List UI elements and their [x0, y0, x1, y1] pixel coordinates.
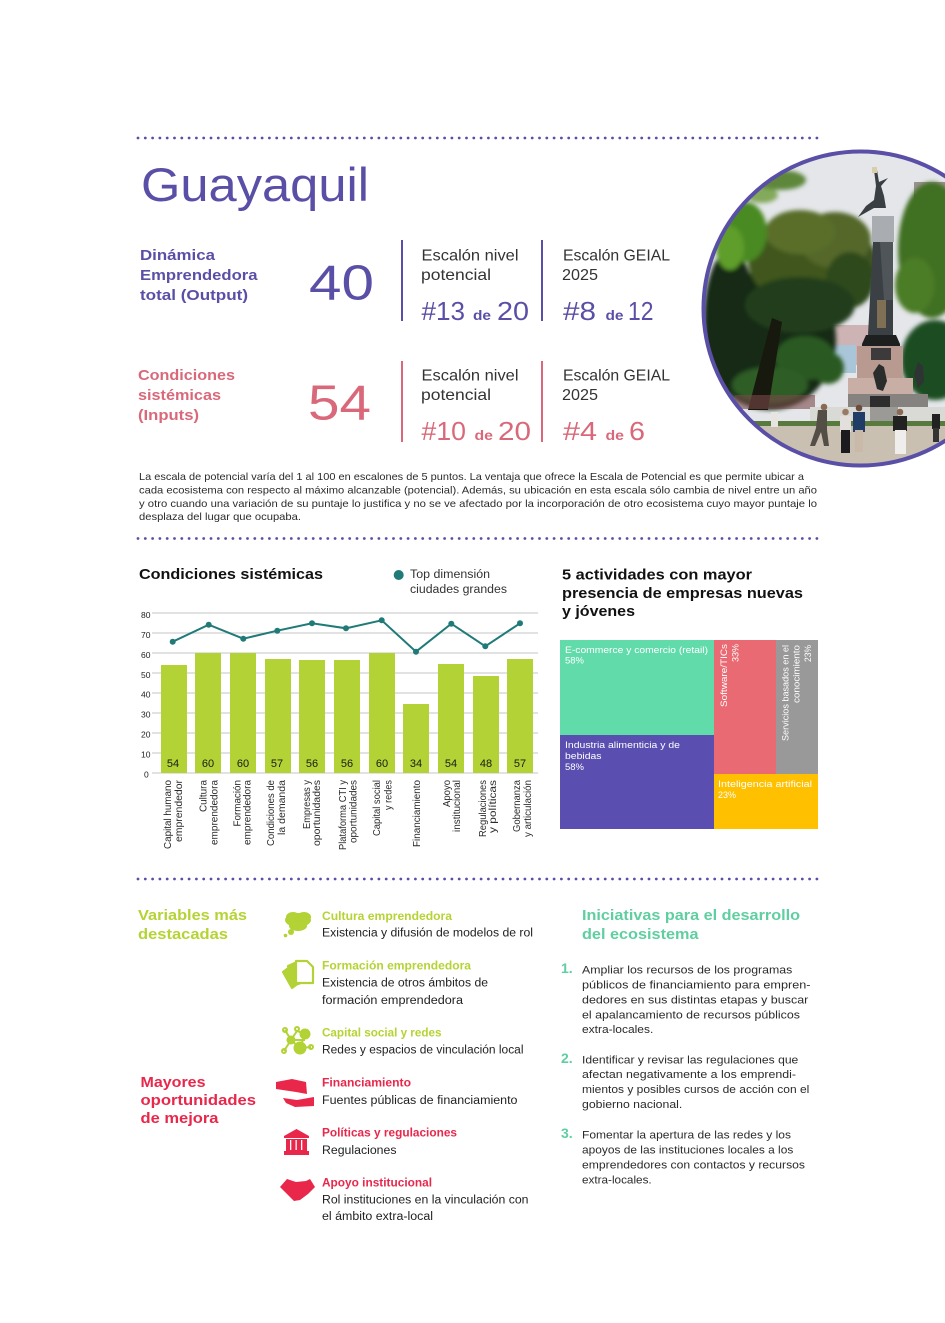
item: Formación emprendedora: formación emprendedora — [322, 995, 464, 1007]
item: Apoyo institucional: Apoyo institucional — [322, 1178, 432, 1190]
x axis labels: la demanda — [277, 780, 288, 835]
item: Financiamiento: Financiamiento — [322, 1078, 411, 1090]
heading: 5 actividades: y jóvenes — [562, 603, 635, 620]
heading: Mayores oportunidades de mejora: oportunidades — [140, 1092, 256, 1109]
item: Capital social y redes: Redes y espacios de vinculación local — [322, 1045, 524, 1057]
initiative 2 — [561, 1050, 809, 1111]
label: inputs: (Inputs) — [138, 407, 199, 424]
rank potential inputs: potencial — [421, 387, 491, 404]
cell: food industry: bebidas — [565, 751, 602, 762]
legend — [394, 569, 507, 596]
item: Políticas y regulaciones: Regulaciones — [322, 1145, 397, 1157]
title: Guayaquil — [141, 158, 369, 211]
rank GEIAL — [562, 248, 670, 326]
rank potential — [421, 248, 529, 326]
rank potential: Escalón nivel — [422, 248, 518, 264]
bar values: 48 — [480, 758, 492, 770]
bars — [161, 653, 533, 773]
label: output: Emprendedora — [140, 267, 258, 284]
cell: e-commerce: 58% — [565, 656, 585, 666]
item: Financiamiento: Fuentes públicas de financiamiento — [322, 1095, 518, 1107]
bar values: 34 — [410, 758, 422, 770]
y axis labels: 20 — [141, 730, 151, 740]
x axis labels: Financiamiento — [412, 780, 423, 847]
x axis labels: Plataforma CTI y — [338, 780, 349, 850]
icon: thought cloud — [284, 912, 311, 937]
cell: knowledge services: conocimiento — [791, 645, 802, 703]
cell: knowledge services: 23% — [803, 645, 814, 662]
y axis labels — [141, 610, 151, 780]
item: Políticas y regulaciones: Políticas y regulaciones — [322, 1128, 457, 1140]
label: inputs — [138, 367, 235, 424]
score 54: 54 — [308, 376, 371, 430]
rank potential: 20 — [497, 296, 529, 326]
line: top dimension large cities — [170, 617, 523, 655]
item: Apoyo institucional — [322, 1178, 528, 1223]
heading: Mayores oportunidades de mejora — [140, 1074, 256, 1127]
initiative 1: públicos de financiamiento para empren- — [582, 979, 811, 991]
y axis labels: 60 — [141, 650, 151, 660]
label: inputs: sistémicas — [138, 387, 221, 404]
label: output: Dinámica — [140, 247, 216, 264]
rank potential: #13 — [422, 296, 465, 326]
photo: Guayaquil monument in circular frame — [700, 150, 945, 476]
x axis labels: Condiciones de — [266, 780, 277, 846]
label: inputs: Condiciones — [138, 367, 235, 384]
initiative 3: 3. — [561, 1125, 573, 1141]
rank GEIAL: #8 — [563, 296, 596, 326]
cell: software — [714, 640, 776, 774]
y axis labels: 40 — [141, 690, 151, 700]
x axis labels: Cultura — [199, 780, 210, 812]
initiative 3 — [561, 1125, 806, 1186]
initiative 3: Fomentar la apertura de las redes y los — [582, 1129, 792, 1141]
x axis labels: Gobernanza — [512, 780, 523, 832]
cell: artificial intelligence: 23% — [718, 790, 737, 801]
bar values: 57 — [514, 758, 526, 770]
x axis labels: institucional — [452, 780, 463, 832]
heading: Condiciones sistémicas chart: Condiciones sistémicas — [139, 566, 323, 583]
item: Políticas y regulaciones — [322, 1128, 457, 1157]
heading: Mayores oportunidades de mejora: de mejora — [140, 1110, 219, 1127]
legend: Top dimensión — [410, 569, 490, 581]
x axis labels: y articulación — [523, 780, 534, 837]
x axis labels: Empresas y — [302, 780, 313, 829]
cell: e-commerce — [560, 640, 714, 735]
initiative 2: 2. — [561, 1050, 573, 1066]
x axis labels: Capital social — [372, 780, 383, 836]
x axis labels: y políticas — [488, 780, 499, 833]
y axis labels: 70 — [141, 630, 151, 640]
item: Financiamiento — [322, 1078, 518, 1107]
x axis labels — [163, 779, 534, 850]
item: Cultura emprendedora — [322, 911, 533, 940]
initiative 1: dedores en sus distintas etapas y buscar — [582, 994, 809, 1006]
label: output: total (Output) — [140, 287, 248, 304]
icon: institution building — [284, 1129, 309, 1155]
bar values: 54 — [167, 758, 179, 770]
rank GEIAL: Escalón GEIAL — [563, 248, 670, 264]
icon: hands giving — [276, 1079, 314, 1107]
bar values: 54 — [445, 758, 457, 770]
cell: food industry — [560, 735, 714, 829]
heading: Variables más destacadas — [138, 907, 247, 943]
rank GEIAL inputs: de — [606, 427, 624, 443]
cell: artificial intelligence — [714, 774, 818, 829]
legend: ciudades grandes — [410, 584, 507, 596]
x axis labels: Formación — [233, 780, 244, 826]
y axis labels: 30 — [141, 710, 151, 720]
treemap: activities — [560, 640, 818, 829]
rank GEIAL inputs — [562, 368, 670, 446]
initiative 2: Identificar y revisar las regulaciones que — [582, 1054, 798, 1066]
rank GEIAL inputs: 6 — [629, 416, 645, 446]
bar values: 57 — [271, 758, 283, 770]
text block: scale explanation — [139, 471, 817, 523]
icon: cards — [283, 961, 313, 988]
y axis labels: 0 — [144, 770, 149, 780]
x axis labels: Apoyo — [442, 780, 453, 807]
rank GEIAL inputs: 2025 — [562, 387, 598, 404]
bar values: 60 — [376, 758, 388, 770]
heading: 5 actividades — [562, 566, 803, 620]
cell: knowledge services: Servicios basados en el — [780, 645, 791, 741]
x axis labels: emprendedora — [243, 780, 254, 845]
initiative 3: apoyos de las instituciones locales a los — [582, 1144, 794, 1156]
initiative 1: Ampliar los recursos de los programas — [582, 964, 793, 976]
rank potential inputs: 20 — [498, 416, 531, 446]
text block: scale explanation: La escala de potencial varía del 1 al 100 en escalones de 5 puntos. La ventaja que ofrece la Escala de Potencial es que permite ubicar a — [139, 471, 804, 483]
cell: e-commerce: E-commerce y comercio (retail) — [565, 645, 708, 656]
y axis labels: 80 — [141, 610, 151, 620]
initiative 2: gobierno nacional. — [582, 1099, 682, 1111]
cell: food industry: 58% — [565, 762, 585, 773]
heading: Mayores oportunidades de mejora: Mayores — [140, 1074, 206, 1091]
initiative 1: 1. — [561, 960, 573, 976]
item: Formación emprendedora: Formación emprendedora — [322, 960, 472, 972]
icon: network — [282, 1027, 313, 1054]
x axis labels: Regulaciones — [478, 780, 489, 837]
x axis labels: oportunidades — [312, 780, 323, 846]
item: Capital social y redes — [322, 1028, 524, 1057]
heading: Variables más destacadas: Variables más — [138, 907, 247, 924]
item: Apoyo institucional: el ámbito extra-local — [322, 1211, 433, 1223]
rank GEIAL: de — [606, 307, 624, 323]
initiative 1: el apalancamiento de recursos públicos — [582, 1009, 801, 1021]
x axis labels: emprendedora — [209, 780, 220, 845]
x axis labels: Capital humano — [163, 780, 174, 849]
text block: scale explanation: cada ecosistema con respecto al máximo alcanzable (potencial). Además, su ubicación en esta escala sólo cambia de nivel entre un año — [139, 484, 817, 496]
bar values: 60 — [237, 758, 249, 770]
cell: software: 33% — [730, 643, 741, 662]
item: Formación emprendedora — [322, 960, 488, 1007]
bar values: 56 — [341, 758, 353, 770]
rank potential inputs: Escalón nivel — [422, 368, 518, 384]
rank potential: de — [473, 307, 491, 323]
heading: Iniciativas: Iniciativas para el desarrollo — [582, 907, 800, 924]
y axis labels: 50 — [141, 670, 151, 680]
text block: scale explanation: y otro cuando una variación de su puntaje lo justifica y no se ve afectado por la incorporación de otro ecosistema cuyo mayor puntaje lo — [139, 498, 817, 510]
item: Capital social y redes: Capital social y redes — [322, 1028, 442, 1040]
heading: Iniciativas: del ecosistema — [582, 926, 699, 943]
rank GEIAL: 12 — [628, 296, 654, 326]
initiative 2: mientos y posibles cursos de acción con el — [582, 1084, 809, 1096]
cell: software: Software/TICs — [719, 644, 730, 707]
y axis labels: 10 — [141, 750, 151, 760]
rank potential inputs: de — [474, 427, 493, 443]
initiative 3: extra-locales. — [582, 1174, 652, 1186]
heading: 5 actividades: presencia de empresas nuevas — [562, 585, 803, 602]
panel: Condiciones sistémicas — [138, 361, 670, 446]
x axis labels: oportunidades — [349, 780, 360, 843]
item: Formación emprendedora: Existencia de otros ámbitos de — [322, 978, 488, 990]
bar values: 60 — [202, 758, 214, 770]
rank GEIAL: 2025 — [562, 267, 598, 284]
cell: artificial intelligence: Inteligencia artificial — [718, 779, 812, 790]
heading: Iniciativas — [582, 907, 800, 943]
label: output — [140, 247, 258, 304]
bar chart: systemic conditions — [141, 610, 538, 850]
x axis labels: y redes — [384, 780, 395, 810]
x axis labels: emprendedor — [174, 779, 185, 842]
initiative 1: extra-locales. — [582, 1024, 653, 1036]
heading: 5 actividades: 5 actividades con mayor — [562, 566, 752, 584]
rank potential inputs: #10 — [422, 416, 466, 446]
initiative 2: afectan negativamente a los emprendi- — [582, 1069, 796, 1081]
item: Cultura emprendedora: Cultura emprendedora — [322, 911, 453, 923]
panel: Dinámica Emprendedora total — [140, 240, 670, 326]
rank GEIAL inputs: #4 — [563, 416, 597, 446]
rank GEIAL inputs: Escalón GEIAL — [563, 368, 670, 384]
text block: scale explanation: desplaza del lugar que ocupaba. — [139, 511, 301, 523]
icon: handshake — [280, 1179, 315, 1201]
cell: food industry: Industria alimenticia y de — [565, 740, 680, 751]
cell: knowledge services — [776, 640, 818, 774]
score 40: 40 — [309, 256, 374, 310]
initiative 3: emprendedores con contactos y recursos — [582, 1159, 806, 1171]
bar values — [167, 758, 526, 770]
item: Apoyo institucional: Rol instituciones en la vinculación con — [322, 1194, 528, 1206]
item: Cultura emprendedora: Existencia y difusión de modelos de rol — [322, 928, 533, 940]
heading: Variables más destacadas: destacadas — [138, 926, 228, 943]
rank potential inputs — [421, 368, 531, 446]
initiative 1 — [561, 960, 811, 1036]
bar values: 56 — [306, 758, 318, 770]
rank potential: potencial — [421, 267, 491, 284]
